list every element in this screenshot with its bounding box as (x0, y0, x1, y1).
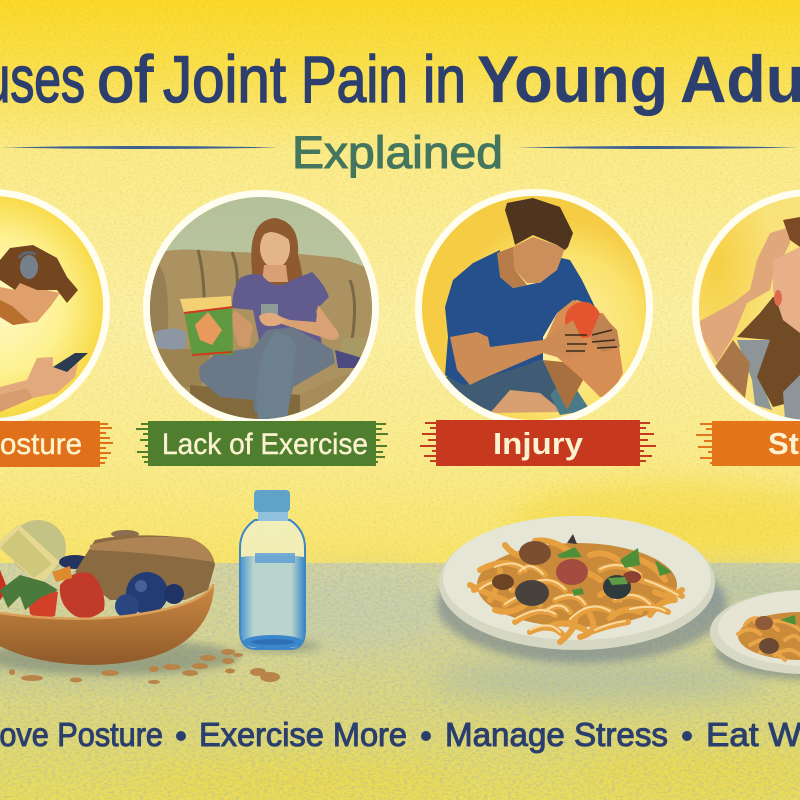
title: of (97, 42, 154, 116)
title (0, 42, 800, 116)
subtitle with rules: Explained (292, 127, 503, 178)
portrait: man holding knee (418, 192, 650, 425)
lemon (0, 520, 66, 585)
portrait: woman on sofa (146, 194, 376, 422)
pasta highlights (480, 563, 678, 632)
title: Young (477, 42, 668, 116)
bottom tips: Exercise More (199, 716, 407, 753)
panel: injury (418, 192, 656, 466)
portrait: woman with headache (695, 192, 800, 425)
meatballs and greens (492, 534, 672, 606)
portrait: man looking at phone (0, 190, 110, 422)
bottom tips: Manage Stress (445, 716, 668, 753)
title: Pain (301, 42, 408, 116)
illustration: healthy food bowl (0, 520, 240, 675)
label banner: stress (696, 421, 800, 466)
pasta strands (470, 540, 682, 642)
label banner: stress: St (768, 426, 799, 461)
strawberries and leaves (0, 566, 104, 618)
label banner: lack of exercise: Lack of Exercise (162, 428, 368, 461)
label banner: injury: Injury (493, 426, 584, 461)
panel: lack of exercise (136, 194, 388, 466)
bread (75, 530, 215, 600)
illustration: small pasta plate (710, 590, 800, 680)
bowl body (0, 584, 214, 665)
blueberries (115, 572, 184, 618)
illustration: water bottle (240, 490, 320, 653)
scattered seeds (9, 649, 280, 684)
table surface (0, 563, 800, 800)
label banner: posture (0, 421, 113, 467)
dark berries behind (59, 555, 91, 569)
illustration: large pasta plate (437, 516, 727, 663)
label banner: lack of exercise (136, 421, 388, 466)
panel: stress (695, 192, 800, 466)
label banner: injury (420, 420, 656, 466)
subtitle with rules (2, 127, 798, 178)
panel: poor posture (0, 190, 113, 467)
label banner: posture: osture (0, 428, 82, 461)
bottom tips (0, 716, 800, 753)
title: Joint (163, 42, 286, 116)
title: in (423, 42, 466, 116)
